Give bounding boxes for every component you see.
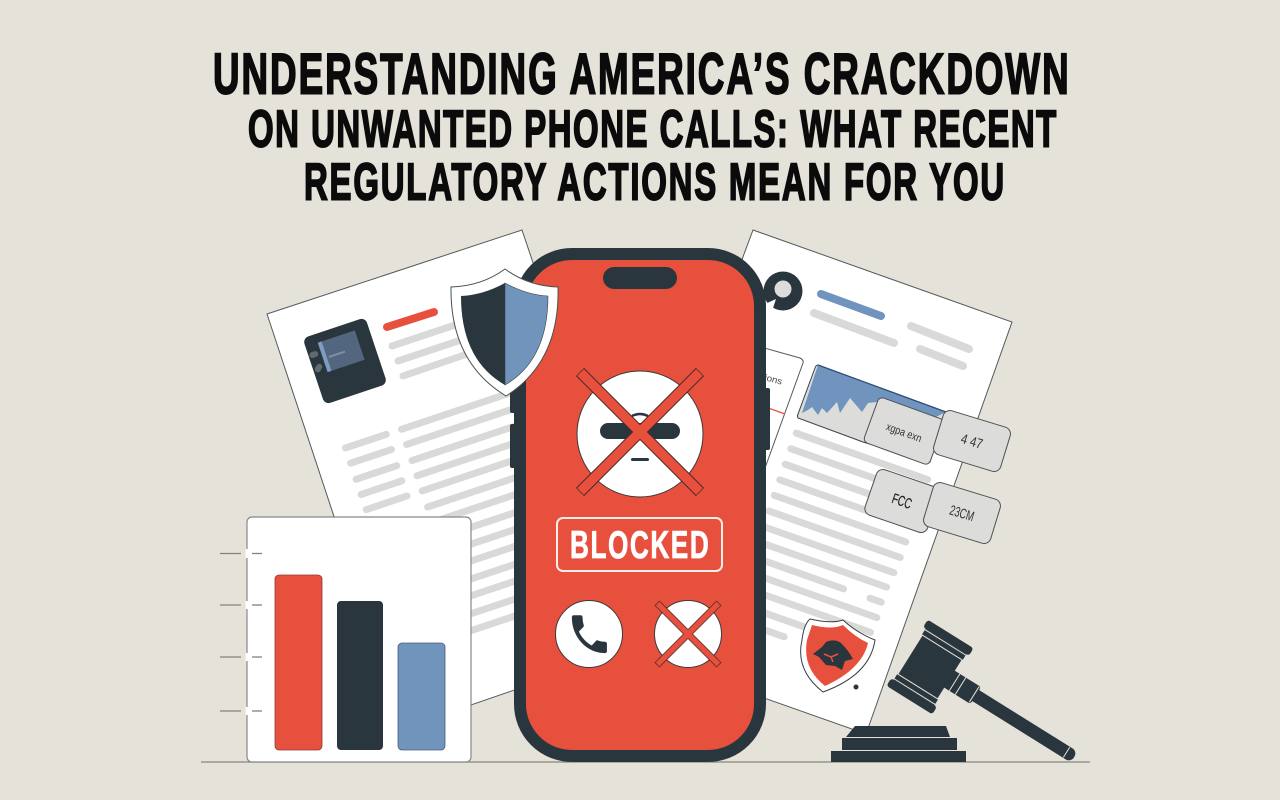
small red shield seal	[801, 619, 875, 692]
phone	[510, 254, 770, 756]
area chart	[798, 365, 946, 462]
BLOCKED label	[557, 518, 722, 571]
BLOCKED label: BLOCKED	[570, 523, 709, 566]
allowed call icon	[556, 600, 622, 668]
stat card: 447	[932, 409, 1012, 473]
phone body and screen	[520, 254, 760, 756]
title: UNDERSTANDING AMERICA’S CRACKDOWN	[213, 42, 1069, 107]
document logo	[764, 272, 802, 311]
document header text lines	[814, 313, 969, 366]
rejected call icon	[654, 600, 722, 668]
title: REGULATORY ACTIONS MEAN FOR YOU	[304, 154, 1004, 211]
title: ON UNWANTED PHONE CALLS: WHAT RECENT	[248, 101, 1056, 158]
ground line	[201, 761, 1090, 763]
axis tick gaps	[246, 549, 248, 715]
stat card: 23CM	[922, 481, 1002, 545]
gavel sound block	[831, 726, 966, 762]
bar chart panel	[220, 517, 471, 762]
stat card: FCC	[863, 468, 941, 534]
document icon tile	[303, 317, 387, 405]
document body text lines	[731, 433, 928, 664]
stat card: xgpa exn	[884, 421, 923, 445]
document heading bar	[387, 312, 434, 327]
blocked caller icon	[577, 371, 703, 497]
document body text lines	[346, 379, 620, 650]
stat card: FCC: FCC	[890, 491, 914, 513]
stat card: 447: 4 47	[959, 430, 985, 452]
gavel	[831, 620, 1095, 790]
title	[213, 42, 1069, 211]
bar: blue	[398, 643, 445, 750]
bar: red	[275, 575, 322, 750]
document heading bar	[821, 294, 881, 316]
side note card	[700, 330, 803, 468]
document header text lines	[392, 320, 470, 376]
notch	[603, 267, 677, 289]
bar: dark	[337, 601, 383, 750]
stat card: 23CM: 23CM	[948, 502, 976, 524]
axis ticks	[220, 554, 262, 711]
panel: right regulatory document	[600, 230, 1012, 734]
security shield	[451, 269, 558, 396]
stat card	[863, 396, 945, 466]
panel: left regulatory document	[267, 230, 660, 728]
side buttons	[510, 385, 770, 468]
gavel head and handle	[886, 620, 1095, 790]
side note card: ions	[763, 372, 784, 387]
